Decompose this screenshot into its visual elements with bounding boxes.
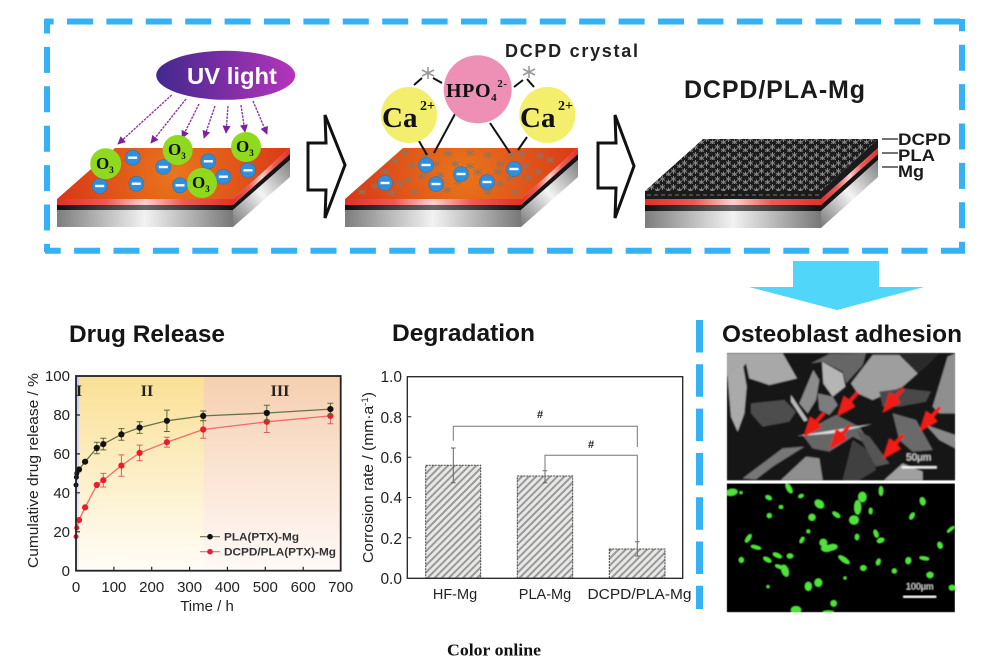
HPO4 ion: 4 xyxy=(491,92,497,104)
heading: Degradation: Degradation xyxy=(392,320,535,347)
significance brackets xyxy=(453,409,637,542)
UV light ellipse: UV light xyxy=(187,63,277,89)
ozone molecules: O xyxy=(168,140,181,159)
bars xyxy=(426,465,665,578)
layered slab xyxy=(645,139,878,228)
HPO4 ion xyxy=(444,55,512,123)
Ca ion left: 2+ xyxy=(420,99,435,114)
phase labels: III xyxy=(271,383,289,400)
y axis title: Corrosion rate / (mm·a xyxy=(361,417,377,563)
slab with crystals xyxy=(345,148,578,227)
ozone molecules: 3 xyxy=(205,184,210,194)
Ca ion left xyxy=(381,87,437,143)
y axis tick labels: 0 xyxy=(62,563,70,580)
arrow: cyan down arrow xyxy=(749,261,924,310)
y axis tick labels xyxy=(380,369,402,588)
ozone molecules: O xyxy=(96,154,109,173)
x axis tick labels: 700 xyxy=(328,579,353,596)
Ca ion left: Ca xyxy=(382,102,418,134)
axes frame xyxy=(407,377,683,578)
y axis tick labels xyxy=(45,368,70,580)
phase labels: I xyxy=(76,383,82,400)
legend: DCPD/PLA(PTX)-Mg xyxy=(224,546,336,558)
y axis tick labels: 60 xyxy=(53,446,70,463)
label: DCPD crystal: DCPD crystal xyxy=(505,41,638,61)
legend xyxy=(200,532,336,558)
x axis tick labels: 100 xyxy=(101,579,126,596)
x axis tick labels: 200 xyxy=(139,579,164,596)
series: PLA(PTX)-Mg xyxy=(74,403,334,488)
negative charges xyxy=(92,150,256,194)
significance brackets: # xyxy=(537,409,543,421)
phase labels xyxy=(76,383,289,400)
step 3: DCPD/PLA-Mg result xyxy=(645,76,951,228)
significance brackets: # xyxy=(588,439,594,451)
y axis title: ) xyxy=(361,392,377,397)
series: DCPD/PLA(PTX)-Mg xyxy=(74,408,334,539)
slab: PLA on Mg xyxy=(57,148,290,227)
phase labels: II xyxy=(141,383,153,400)
Ca ion right: 2+ xyxy=(558,99,573,114)
image: green fluorescence micrograph xyxy=(726,483,955,613)
Ca ion right: Ca xyxy=(520,102,556,134)
ozone molecules: O xyxy=(236,137,249,156)
y axis tick labels: 0.4 xyxy=(380,490,402,507)
HPO4 ion: HPO xyxy=(446,80,491,102)
UV light ellipse xyxy=(156,51,295,100)
step 2: DCPD crystal nucleation xyxy=(345,41,638,227)
y axis tick labels: 0.8 xyxy=(380,410,402,427)
ozone molecules: 3 xyxy=(181,151,186,161)
title: DCPD/PLA-Mg: DCPD/PLA-Mg xyxy=(684,76,865,104)
x axis tick labels xyxy=(72,579,353,596)
image: SEM micrograph with red arrows xyxy=(727,353,955,481)
y axis tick labels: 0.6 xyxy=(380,450,402,467)
category labels: PLA-Mg xyxy=(519,587,571,603)
layer labels: Mg xyxy=(898,162,924,181)
y axis tick labels: 1.0 xyxy=(380,369,402,386)
axes frame xyxy=(76,376,341,571)
y axis tick labels: 0.2 xyxy=(380,531,402,548)
negative charges on crystal surface xyxy=(378,158,522,192)
category labels: HF-Mg xyxy=(433,587,477,603)
chart: drug release line chart xyxy=(25,368,353,615)
heading: Osteoblast adhesion: Osteoblast adhesion xyxy=(722,321,962,348)
heading: Drug Release: Drug Release xyxy=(69,321,225,348)
category labels xyxy=(433,587,692,603)
x axis tick labels: 400 xyxy=(215,579,240,596)
x axis tick labels: 600 xyxy=(291,579,316,596)
y axis tick labels: 40 xyxy=(53,485,70,502)
x axis tick labels: 300 xyxy=(177,579,202,596)
y axis tick labels: 0.0 xyxy=(380,571,402,588)
layer labels: PLA xyxy=(898,146,935,165)
panel: dashed process frame xyxy=(45,19,965,253)
y axis tick labels: 80 xyxy=(53,407,70,424)
divider: vertical dashed line xyxy=(696,320,703,609)
arrow: step 2 to step 3 xyxy=(598,115,634,218)
image: green fluorescence micrograph: 100μm xyxy=(906,581,933,591)
layer labels xyxy=(882,130,951,181)
caption: Color online: Color online xyxy=(447,640,541,660)
y axis title: Cumulative drug release / % xyxy=(25,373,42,568)
y axis title: -1 xyxy=(360,397,370,406)
x axis tick labels: 0 xyxy=(72,579,80,596)
category labels: DCPD/PLA-Mg xyxy=(588,587,692,603)
ozone molecules: 3 xyxy=(109,165,114,175)
crystal icons xyxy=(422,66,535,79)
x axis title: Time / h xyxy=(180,598,234,615)
chart: corrosion rate bar chart xyxy=(360,369,692,603)
y axis tick labels: 20 xyxy=(53,524,70,541)
error bars xyxy=(451,448,640,556)
ozone molecules: 3 xyxy=(249,148,254,158)
Ca ion right xyxy=(519,87,575,143)
release phase bands xyxy=(76,376,341,571)
HPO4 ion: 2- xyxy=(497,78,508,90)
x axis tick labels: 500 xyxy=(253,579,278,596)
y axis tick labels: 100 xyxy=(45,368,70,385)
step 1: UV ozone treatment xyxy=(57,51,295,227)
ozone molecules xyxy=(90,132,261,198)
connector lines xyxy=(414,78,534,155)
ozone molecules: O xyxy=(192,173,205,192)
layer labels: DCPD xyxy=(898,130,951,149)
arrow: step 1 to step 2 xyxy=(308,115,345,218)
legend: PLA(PTX)-Mg xyxy=(224,532,299,544)
image: SEM micrograph with red arrows: 50μm xyxy=(906,453,931,464)
dotted UV arrows xyxy=(118,95,267,144)
